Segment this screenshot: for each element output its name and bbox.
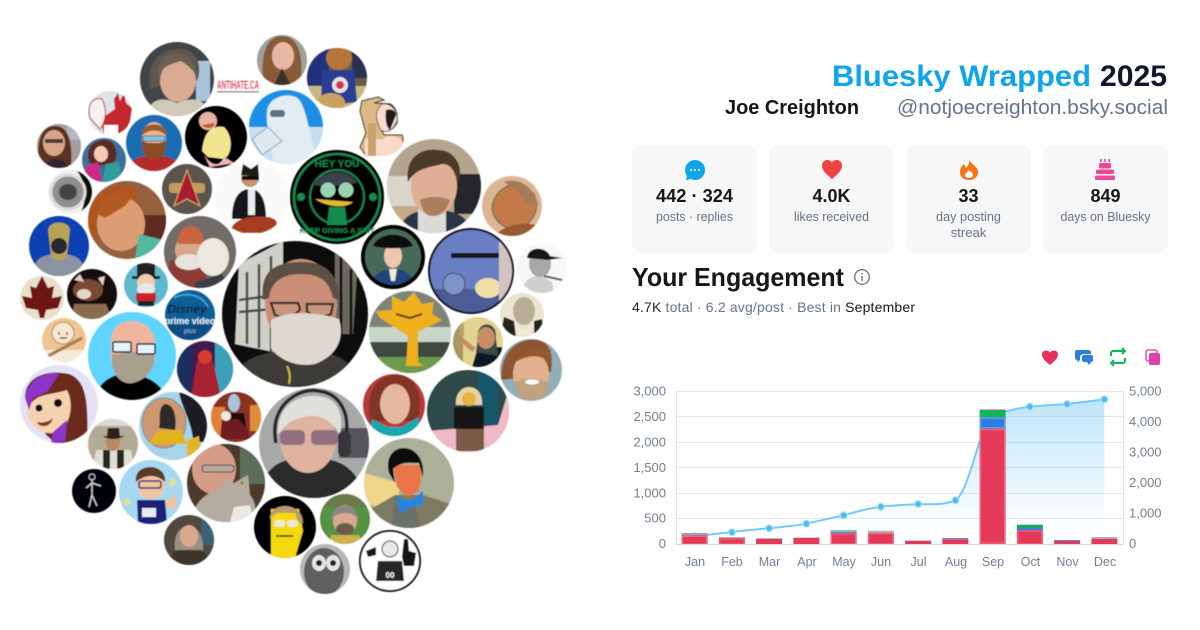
icon: reposts xyxy=(1111,348,1125,366)
avatar: woman with headphones xyxy=(259,388,369,498)
month labels: Jun xyxy=(871,555,891,569)
stat card: posts and replies: posts · replies xyxy=(656,209,733,224)
avatar: simpsons-style character xyxy=(254,496,316,558)
avatar: woman with short hair xyxy=(140,42,214,116)
month labels: Apr xyxy=(797,555,817,569)
avatar: tuxedo caricature xyxy=(231,163,290,234)
avatar: iron maiden xyxy=(29,216,89,276)
stat card: days on bluesky: days on Bluesky xyxy=(1060,209,1151,224)
chart: engagement by month xyxy=(633,384,1162,569)
avatar: stick figure with pencil xyxy=(42,318,86,362)
avatar: yellow shirt photo xyxy=(139,392,207,460)
right axis labels: 3,000 xyxy=(1129,444,1162,460)
avatar: orange hair woman xyxy=(88,181,166,259)
right axis labels: 4,000 xyxy=(1129,414,1162,429)
stat card: streak: 33 xyxy=(958,186,979,206)
avatar: man with cat xyxy=(187,444,265,522)
stat card: days on bluesky xyxy=(1043,145,1168,253)
avatar: antihate logo xyxy=(216,78,260,93)
avatar: hey you duck patch: HEY YOU xyxy=(315,159,359,170)
avatar: disney prime video: Disney xyxy=(167,302,208,316)
avatar: bearded man portrait xyxy=(500,339,562,401)
avatar: canadian history xyxy=(20,276,64,320)
left axis labels: 2,000 xyxy=(633,434,666,450)
avatar: alf goalie xyxy=(307,46,367,113)
stat card: streak: streak xyxy=(951,225,987,240)
left axis labels xyxy=(633,384,666,551)
month labels: Oct xyxy=(1021,555,1041,569)
avatar: hey you duck patch xyxy=(290,150,384,244)
avatar: main man with mask xyxy=(222,241,368,387)
left axis labels: 1,500 xyxy=(633,460,666,475)
month labels: May xyxy=(832,555,857,569)
avatar: lemongrab mascot xyxy=(369,291,451,373)
left axis labels: 0 xyxy=(659,536,666,551)
avatar: football mascot line art xyxy=(360,531,420,591)
avatar: red cloaked figure xyxy=(177,341,233,397)
month labels: Aug xyxy=(945,555,967,569)
stat card: streak xyxy=(906,145,1031,253)
avatar: bald cartoon man xyxy=(88,312,176,400)
avatar: old man sketch xyxy=(500,293,544,337)
icon: speech bubble xyxy=(685,160,705,180)
title: Bluesky Wrapped xyxy=(832,60,1091,93)
month labels: Jul xyxy=(911,555,926,569)
icon: replies xyxy=(1075,350,1093,365)
avatar: cowboy xyxy=(88,419,138,469)
stacked bars xyxy=(682,409,1117,544)
user handle: @notjoecreighton.bsky.social xyxy=(897,97,1168,119)
stat card: likes xyxy=(769,145,894,253)
left axis labels: 2,500 xyxy=(633,409,666,424)
month labels: Mar xyxy=(759,555,780,569)
avatar: sketch woman xyxy=(482,176,542,236)
icon: quotes xyxy=(1146,350,1160,365)
avatar: lego figure xyxy=(427,370,509,452)
month labels xyxy=(685,555,1116,569)
stat card: likes: 4.0K xyxy=(812,186,850,206)
icon: like xyxy=(1042,350,1058,365)
right axis labels: 5,000 xyxy=(1129,384,1162,398)
cumulative area xyxy=(695,399,1104,544)
avatar: woman grey curly hair xyxy=(164,515,214,565)
left axis labels: 500 xyxy=(644,510,666,526)
avatar: smiling man xyxy=(387,139,481,233)
avatar: hey you duck patch: KEEP GIVING A SHIT xyxy=(300,226,375,235)
avatar: monopoly man xyxy=(124,262,168,307)
cumulative points xyxy=(691,396,1108,539)
icon: flame xyxy=(960,159,978,180)
avatar: disney prime video: plus xyxy=(184,328,197,335)
left axis labels: 1,000 xyxy=(633,486,666,500)
icon: heart xyxy=(822,160,842,179)
avatar: antihate logo: ANTIHATE.CA xyxy=(217,80,259,92)
avatar: cartoon lady xyxy=(82,138,126,182)
avatar: purple hair cartoon xyxy=(20,365,98,443)
avatar: dancing stick figure xyxy=(72,469,116,513)
avatar: starfleet badge xyxy=(162,164,212,214)
stat card: streak: day posting xyxy=(936,209,1001,224)
right axis labels: 2,000 xyxy=(1129,475,1162,490)
month labels: Feb xyxy=(721,555,743,569)
avatar: smoking man sketch xyxy=(524,248,564,294)
avatar: pink cartoon on black xyxy=(185,106,247,168)
stat card: likes: likes received xyxy=(794,209,869,224)
month labels: Sep xyxy=(982,555,1004,569)
avatar: football mascot line art: 00 xyxy=(386,571,395,580)
month labels: Jan xyxy=(685,555,705,569)
avatar: mary poppins xyxy=(361,225,425,289)
avatar: disney prime video xyxy=(165,290,216,340)
stat card: days on bluesky: 849 xyxy=(1090,186,1121,206)
right axis labels: 0 xyxy=(1129,536,1136,551)
avatar: woman with drink xyxy=(453,317,503,367)
avatar: cartoon dog xyxy=(360,97,403,156)
right axis labels: 1,000 xyxy=(1129,506,1162,520)
cumulative line xyxy=(695,399,1104,536)
user name: Joe Creighton xyxy=(725,97,859,119)
avatar: blue alien figure xyxy=(211,392,261,442)
right axis labels xyxy=(1129,384,1162,551)
section heading: Your Engagement xyxy=(632,262,844,292)
avatar: waving cartoon man xyxy=(119,460,183,524)
avatar: disney prime video: prime video xyxy=(165,316,216,326)
avatar: red panda xyxy=(67,269,117,319)
avatar: astronaut cat xyxy=(48,170,92,214)
avatar: star trek beard man xyxy=(126,115,182,171)
avatar: red moose xyxy=(88,91,132,135)
avatar cluster xyxy=(20,35,567,596)
chart legend xyxy=(1042,348,1160,366)
icon: info xyxy=(855,270,869,284)
avatar: woman with glasses xyxy=(37,124,81,168)
avatar: anime man xyxy=(364,438,454,528)
stat card: posts and replies: 442 · 324 xyxy=(656,186,733,206)
avatar: bluesky dragon xyxy=(249,90,323,167)
left axis labels: 3,000 xyxy=(633,384,666,398)
engagement summary: 4.7K total · 6.2 avg/post · Best in September xyxy=(632,299,915,315)
avatar: woman long hair xyxy=(257,35,307,85)
month labels: Dec xyxy=(1094,555,1116,569)
avatar: man with dog xyxy=(164,216,236,288)
stat card: posts and replies xyxy=(632,145,757,253)
avatar: man on green field xyxy=(320,494,370,544)
title: 2025 xyxy=(1100,60,1167,93)
avatar: death star xyxy=(428,228,514,314)
avatar: red hair woman xyxy=(363,374,425,436)
icon: cake xyxy=(1095,159,1115,180)
avatar: owl xyxy=(300,544,350,596)
month labels: Nov xyxy=(1056,555,1079,569)
